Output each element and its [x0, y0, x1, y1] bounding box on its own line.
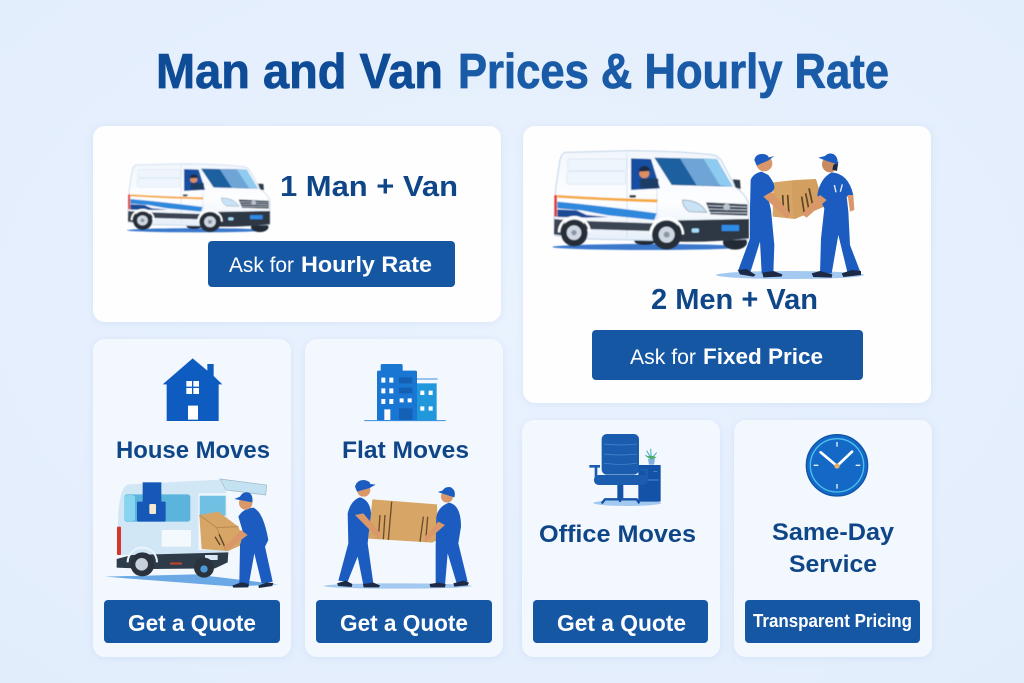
title: Man and Van	[156, 45, 443, 99]
icon: house	[163, 358, 222, 421]
title	[156, 45, 889, 99]
panel: office moves	[522, 420, 720, 657]
panel: same-day service	[734, 420, 932, 657]
button: get a quote	[316, 600, 492, 643]
icon: clock	[806, 435, 868, 496]
title: Prices & Hourly Rate	[458, 45, 889, 99]
heading: House Moves: House Moves	[116, 437, 270, 464]
heading: Same-Day Service: Same-Day	[772, 519, 895, 546]
illustration: mover loading van	[105, 479, 278, 588]
heading: Office Moves: Office Moves	[539, 521, 696, 548]
button: get a quote: Get a Quote	[128, 610, 256, 636]
heading: 2 Men + Van: 2 Men + Van	[651, 284, 818, 316]
button: transparent pricing: Transparent Pricing	[753, 611, 912, 631]
button: get a quote: Get a Quote	[557, 610, 686, 636]
icon: apartment building	[364, 364, 446, 421]
panel: 2 men and van	[523, 126, 931, 403]
button: transparent pricing	[745, 600, 920, 643]
button: ask for fixed price: Ask for	[630, 346, 696, 369]
icon: office chair and cabinet	[589, 434, 661, 506]
button: ask for hourly rate: Ask for	[229, 254, 294, 277]
illustration: two movers with box	[324, 480, 472, 589]
illustration: large van	[552, 151, 749, 250]
heading: Flat Moves: Flat Moves	[342, 437, 469, 464]
heading: Same-Day Service: Service	[789, 551, 877, 578]
illustration: small van	[127, 164, 270, 232]
button: ask for hourly rate: Hourly Rate	[301, 252, 432, 277]
heading: Same-Day Service	[772, 519, 895, 578]
panel: flat moves	[305, 339, 503, 657]
button: ask for fixed price: Fixed Price	[703, 344, 823, 369]
illustration: two movers with box	[716, 153, 864, 279]
panel: 1 man and van	[93, 126, 501, 322]
button: get a quote	[104, 600, 280, 643]
button: get a quote: Get a Quote	[340, 610, 468, 636]
button: ask for fixed price	[592, 330, 863, 380]
heading: 1 Man + Van: 1 Man + Van	[280, 171, 458, 203]
button: get a quote	[533, 600, 708, 643]
panel: house moves	[93, 339, 291, 657]
button: ask for hourly rate	[208, 241, 455, 287]
